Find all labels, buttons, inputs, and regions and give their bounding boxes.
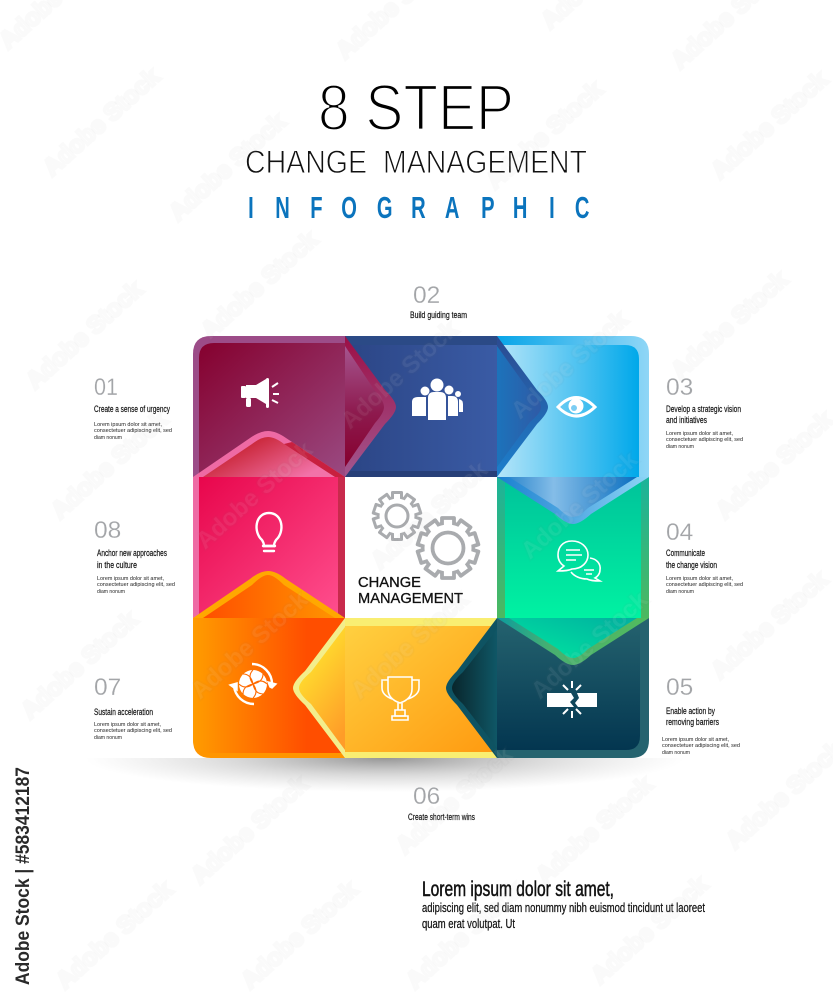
footer text block: Lorem ipsum dolor sit amet, (422, 878, 614, 901)
icon: small gear (373, 492, 421, 540)
center label (358, 575, 463, 607)
icon: large gear (418, 518, 478, 578)
title: 8 STEP (318, 71, 514, 144)
watermark: Adobe Stock (21, 276, 149, 394)
icon: broken barrier (547, 681, 597, 718)
step 03 label: 03 (666, 374, 693, 401)
step 03 label: Lorem ipsum dolor sit amet, (666, 431, 733, 437)
watermark: Adobe Stock (336, 316, 464, 434)
arrow: 05 into 06 (446, 618, 497, 758)
step 03 label (666, 374, 743, 450)
panel: 01 maroon base (193, 336, 345, 477)
step 08 label: Anchor new approaches (97, 548, 167, 558)
title: CHANGE (245, 144, 367, 180)
step 02 label (410, 282, 467, 320)
watermark: Adobe Stock (191, 436, 319, 554)
step 06 label: Create short-term wins (408, 812, 475, 822)
step 04 label: diam nonum (666, 589, 694, 595)
watermark: Adobe Stock (186, 586, 314, 704)
icon: team of people (412, 378, 463, 420)
watermark: Adobe Stock (366, 456, 494, 574)
watermark: Adobe Stock (706, 566, 833, 684)
step 08 label: in the culture (97, 560, 137, 570)
panel: 05 dark teal base (497, 618, 649, 758)
watermark: Adobe Stock (516, 446, 644, 564)
step 04 label: consectetuer adipiscing elit, sed (666, 582, 743, 588)
step 07 label: Sustain acceleration (94, 707, 153, 717)
arrow: 08 into 01 (193, 431, 345, 477)
step 08 label: Lorem ipsum dolor sit amet, (97, 576, 164, 582)
watermark: Adobe Stock (186, 771, 314, 889)
step 01 label: diam nonum (94, 435, 122, 441)
step 04 label: Communicate (666, 548, 705, 558)
panel: 04 green base (497, 477, 649, 618)
step 02 label: 02 (413, 282, 440, 309)
center label: CHANGE (358, 575, 421, 591)
step 05 label: 05 (666, 674, 693, 701)
step 01 label: Create a sense of urgency (94, 404, 170, 414)
panel: 03 light blue base (497, 336, 649, 477)
shadow under diagram (124, 758, 646, 788)
watermark: Adobe Stock (346, 586, 474, 704)
step 07 label: diam nonum (94, 735, 122, 741)
icon: eye (558, 398, 595, 416)
watermark: Adobe Stock (391, 741, 519, 859)
step 07 label: 07 (94, 674, 121, 701)
step 08 label (94, 517, 175, 595)
icon: megaphone (241, 378, 279, 408)
step 01 label: 01 (94, 374, 118, 401)
title: MANAGEMENT (383, 144, 587, 180)
watermark: Adobe Stock (164, 108, 292, 226)
watermark: Adobe Stock (38, 63, 166, 181)
footer text block: adipiscing elit, sed diam nonummy nibh euismod tincidunt ut laoreet (422, 901, 705, 915)
step 04 label: Lorem ipsum dolor sit amet, (666, 576, 733, 582)
center label: MANAGEMENT (358, 591, 463, 607)
step 04 label: 04 (666, 519, 693, 546)
title: INFOGRAPHIC (248, 192, 589, 225)
step 02 label: Build guiding team (410, 310, 467, 320)
watermark: Adobe Stock (481, 76, 609, 194)
step 05 label: removing barriers (666, 717, 719, 727)
watermark: Adobe Stock (46, 406, 174, 524)
step 06 label (408, 783, 475, 822)
icon: trophy (382, 677, 419, 720)
panel: 06 yellow orange base (345, 618, 497, 758)
arrow: 07 into 08 (193, 571, 345, 618)
step 03 label: and initiatives (666, 415, 707, 425)
title (245, 71, 589, 225)
step 03 label: Develop a strategic vision (666, 404, 741, 414)
step 01 label (94, 374, 172, 441)
step 08 label: 08 (94, 517, 121, 544)
watermark: Adobe Stock (16, 606, 144, 724)
step 05 label: consectetuer adipiscing elit, sed (662, 743, 740, 749)
watermark: Adobe Stock (51, 876, 179, 994)
arrow: 03 into 04 (497, 477, 649, 524)
watermark: Adobe Stock (586, 871, 714, 989)
watermark: Adobe Stock (526, 586, 654, 704)
stock id vertical text: Adobe Stock | #583412187 (13, 767, 34, 985)
step 08 label: diam nonum (97, 589, 125, 595)
step 01 label: consectetuer adipiscing elit, sed (94, 428, 172, 434)
watermark: Adobe Stock (531, 771, 659, 889)
step 04 label: the change vision (666, 560, 717, 570)
step 03 label: consectetuer adipiscing elit, sed (666, 437, 743, 443)
watermark: Adobe Stock (706, 66, 833, 184)
step 08 label: consectetuer adipiscing elit, sed (97, 582, 175, 588)
arrow: 02 into 03 (497, 336, 548, 477)
footer text block: quam erat volutpat. Ut (422, 917, 515, 931)
step 05 label: Enable action by (666, 706, 715, 716)
watermark: Adobe Stock (666, 266, 794, 384)
step 05 label: diam nonum (662, 750, 690, 756)
watermark: Adobe Stock (236, 876, 364, 994)
step 07 label: Lorem ipsum dolor sit amet, (94, 722, 161, 728)
icon: light bulb (257, 513, 281, 551)
step 03 label: diam nonum (666, 444, 694, 450)
step 05 label: Lorem ipsum dolor sit amet, (662, 737, 729, 743)
footer text block (422, 878, 705, 931)
step 01 label: Lorem ipsum dolor sit amet, (94, 422, 162, 428)
step 06 label: 06 (413, 783, 440, 810)
icon: acceleration cycle (230, 664, 276, 704)
watermark: Adobe Stock (506, 306, 634, 424)
panel: center white (345, 477, 497, 618)
arrow: 01 into 02 (345, 336, 396, 477)
panel: 02 navy base (345, 336, 497, 477)
step 05 label (662, 674, 740, 756)
panel: 07 orange base (193, 618, 345, 758)
step 07 label: consectetuer adipiscing elit, sed (94, 728, 172, 734)
step 07 label (94, 674, 172, 741)
icon: speech bubbles (558, 541, 600, 581)
panel: 08 pink base (193, 477, 345, 618)
step 04 label (666, 519, 743, 595)
arrow: 06 into 07 (293, 618, 345, 758)
watermark: Adobe Stock (401, 876, 529, 994)
arrow: 04 into 05 (497, 618, 649, 665)
watermark: Adobe Stock (196, 226, 324, 344)
